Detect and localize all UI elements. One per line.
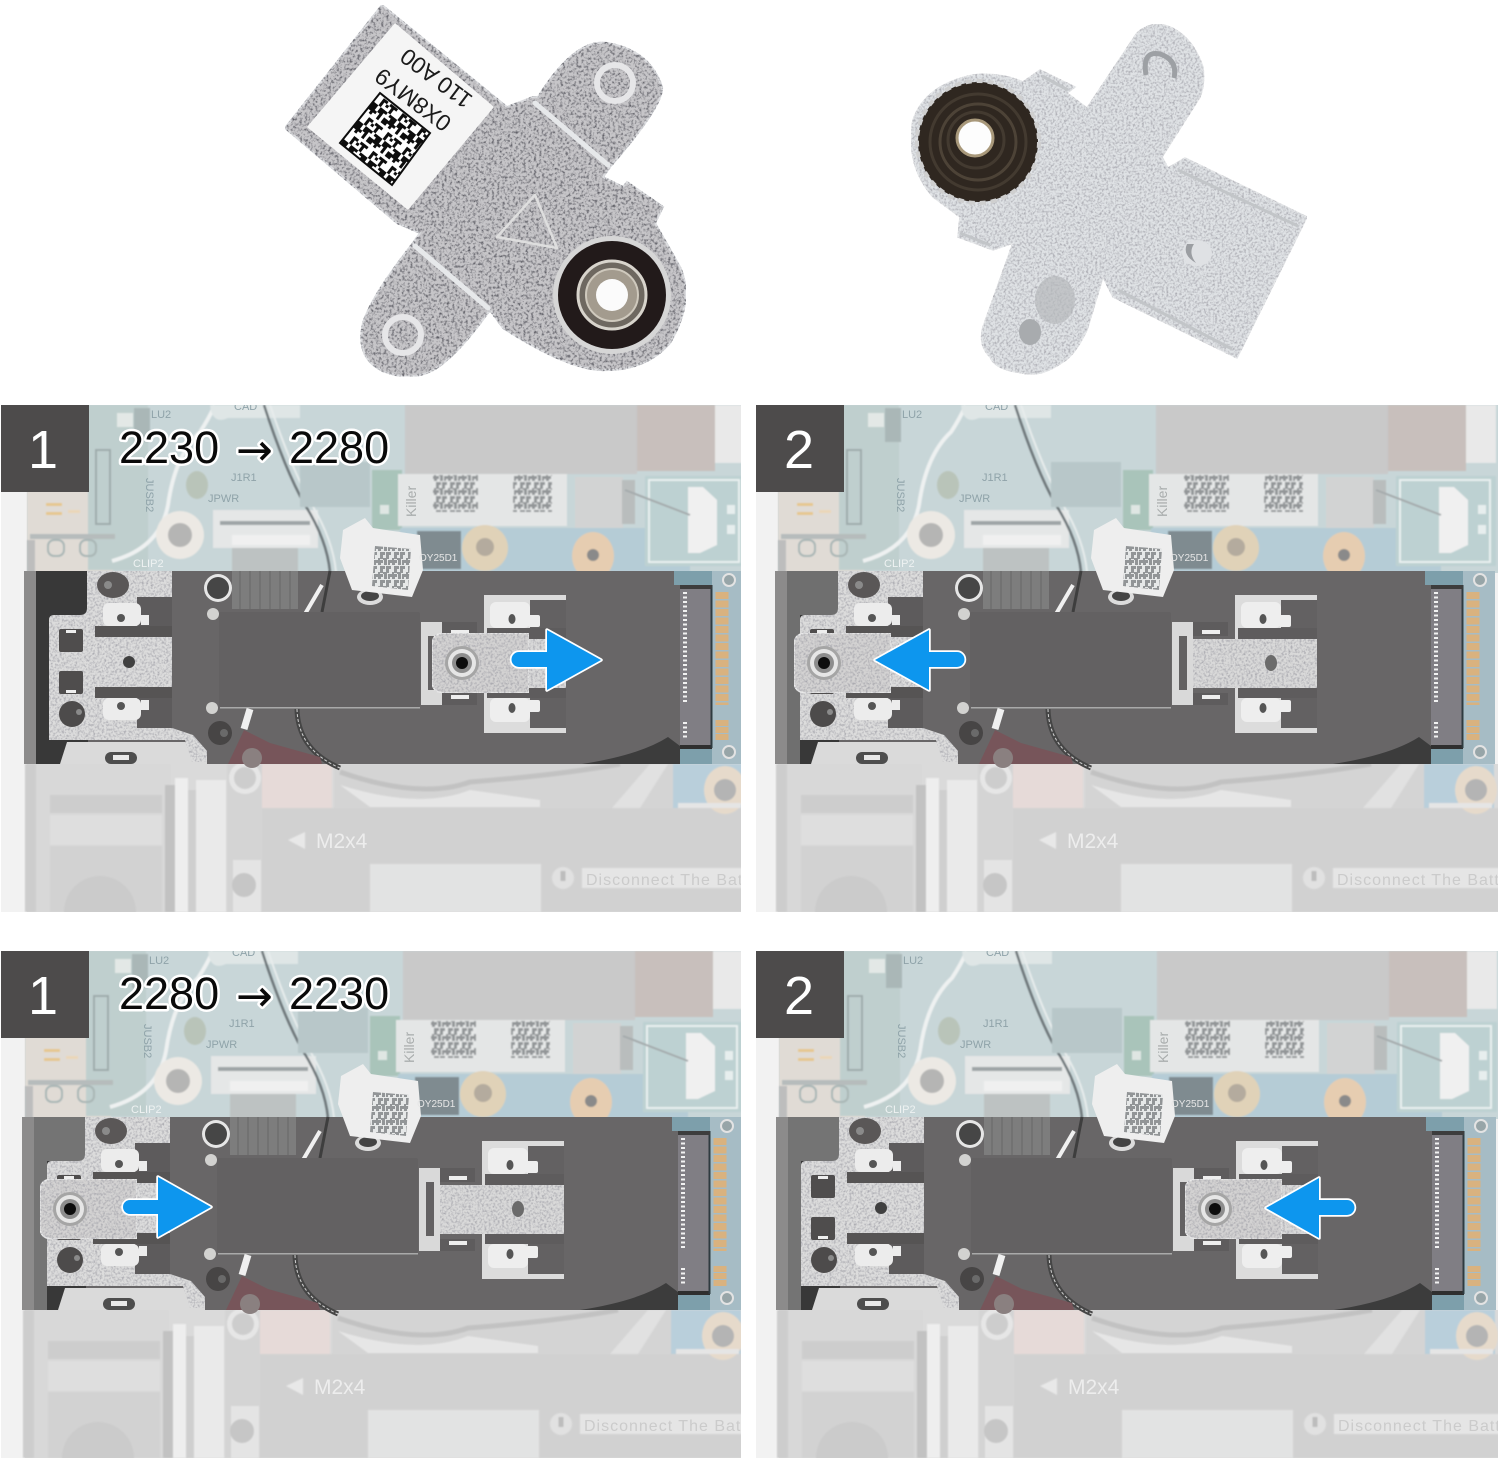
panel: step 2, 2280 to 2230 [752,947,1500,1461]
board photo: CAD [986,947,1009,959]
arm washers [385,65,633,353]
step number [756,405,844,492]
heading: → [236,971,273,1022]
board photo: Killer [403,486,419,517]
step number: 1 [28,420,58,480]
board photo: CAD [985,401,1008,413]
board photo: Disconnect The Batt [1337,872,1500,889]
board photo: JUSB2 [895,1024,907,1058]
label text: 0X8MY9 [370,63,456,137]
board photo: Disconnect The Batt [584,1418,747,1435]
step number: 1 [28,966,58,1026]
board photo: J1R1 [982,472,1008,484]
board photo: OY25D1 [417,1099,456,1110]
arrow: slide left [875,630,965,690]
data matrix [340,93,430,185]
step number [756,951,844,1038]
step number [1,405,89,492]
board photo: CAD [234,401,257,413]
panel: step 1, 2280 to 2230 [0,947,758,1461]
heading: 2230 [119,422,219,473]
part photo: bracket rear [911,24,1307,374]
part photo: bracket front with label [285,5,686,376]
heading: 2230 [289,968,389,1019]
label text: 110 A00 [395,43,477,114]
step number: 2 [784,966,814,1026]
board photo: JPWR [960,1039,991,1051]
board photo: M2x4 [1068,1376,1120,1399]
board photo: OY25D1 [1170,553,1209,564]
step number: 2 [784,420,814,480]
arrow: slide left [1266,1178,1354,1238]
panel: step 2, 2230 to 2280 [751,401,1500,948]
board photo: JPWR [208,493,239,505]
label text [370,43,477,137]
board photo: LU2 [151,409,171,421]
board photo: OY25D1 [1171,1099,1210,1110]
heading: 2280 [119,968,219,1019]
board photo: M2x4 [1067,830,1119,853]
board photo: JPWR [206,1039,237,1051]
panel: step 1, 2230 to 2280 [0,401,760,948]
board photo: Killer [1155,1032,1171,1063]
board photo: JPWR [959,493,990,505]
board photo: CAD [232,947,255,959]
bend creases [415,103,608,308]
board photo: JUSB2 [141,1024,153,1058]
board photo [752,947,1500,1461]
arrow: slide right [512,630,601,690]
heading: → [236,425,273,476]
threaded nut [553,236,671,354]
board photo: J1R1 [229,1018,255,1030]
board photo: M2x4 [314,1376,366,1399]
board photo: Killer [1154,486,1170,517]
heading: 2280 [289,422,389,473]
embossed triangle [497,195,557,248]
board photo: Killer [401,1032,417,1063]
board photo: M2x4 [316,830,368,853]
board photo: JUSB2 [894,478,906,512]
board photo: J1R1 [231,472,257,484]
board photo: CLIP2 [131,1104,162,1116]
board photo: OY25D1 [419,553,458,564]
label sticker [307,23,494,210]
board photo: CLIP2 [885,1104,916,1116]
board photo: J1R1 [983,1018,1009,1030]
board photo [0,947,758,1461]
board photo: JUSB2 [143,478,155,512]
arrow: slide right [123,1177,211,1237]
board photo: Disconnect The Batt [586,872,749,889]
board photo: LU2 [149,955,169,967]
board photo [0,401,760,948]
rolled edges [960,76,1298,349]
dimples [1019,53,1212,345]
board photo: CLIP2 [133,558,164,570]
board photo: LU2 [903,955,923,967]
board photo: CLIP2 [884,558,915,570]
board photo: LU2 [902,409,922,421]
metal body [911,24,1307,374]
step number [1,951,89,1038]
board photo: Disconnect The Batt [1338,1418,1500,1435]
board photo [751,401,1500,948]
metal body [285,5,686,376]
knurled nut [917,81,1039,203]
